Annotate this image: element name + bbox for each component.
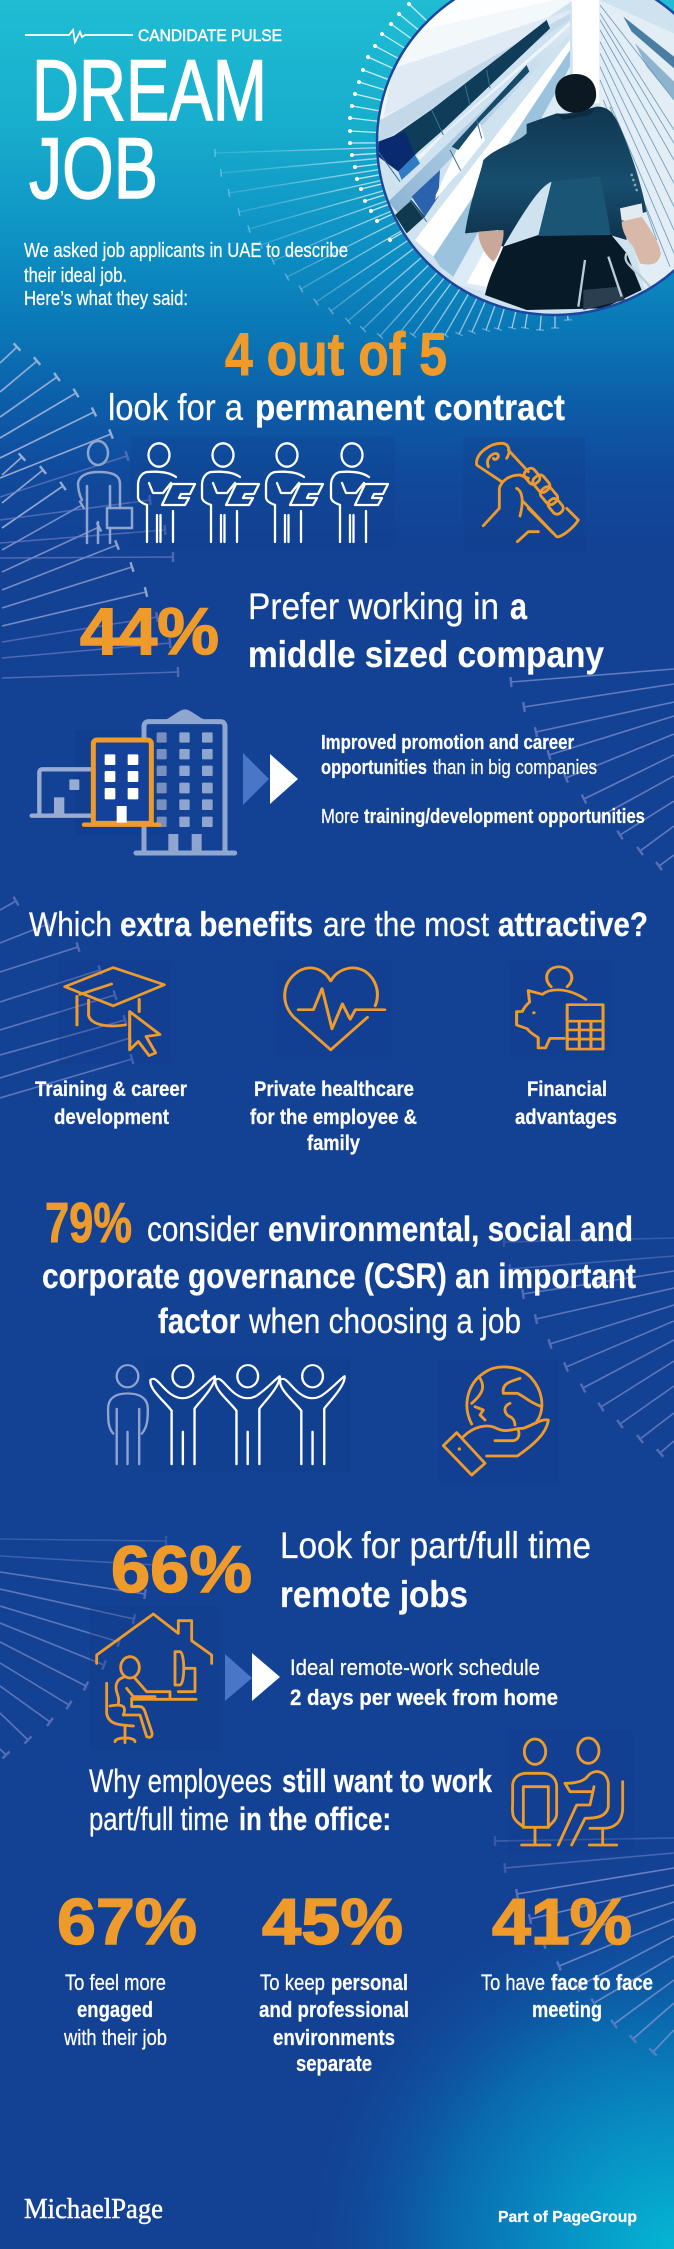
stat: 67 percent: 67% (57, 1885, 197, 1958)
label: private healthcare (250, 1078, 417, 1155)
text: to feel more engaged (63, 1970, 167, 2050)
panel: benefit training (35, 961, 187, 1129)
icon: person working from home (90, 1606, 220, 1750)
intro text (24, 240, 348, 310)
heading: reasons for the office: part/full time (89, 1801, 229, 1837)
text: keep environments separate: environments (273, 2025, 395, 2050)
icon: four of five people with contract (78, 436, 395, 548)
text: keep environments separate: and professional (259, 1997, 409, 2022)
text: company size reasons: Improved promotion and career (321, 732, 574, 754)
label: training and career development (35, 1078, 187, 1129)
title: DREAM (32, 43, 267, 139)
subheading: permanent contract: look for a (108, 387, 243, 428)
label: financial advantages: advantages (515, 1106, 617, 1129)
bottom right glow (284, 1859, 674, 2249)
text: keep environments separate: personal (331, 1970, 408, 1995)
left starburst rays, lower (0, 1539, 166, 1755)
icon: two people meeting (508, 1730, 633, 1853)
header: candidate pulse tag (25, 26, 282, 45)
stat: 79 percent CSR statement: 79% (45, 1191, 132, 1255)
panel: benefit healthcare (250, 961, 417, 1155)
left starburst rays, benefits (0, 901, 132, 1098)
title: JOB (29, 121, 158, 217)
left starburst rays, upper (0, 347, 178, 678)
text: keep environments separate (259, 1970, 409, 2076)
heading: reasons for the office: Why employees (89, 1763, 272, 1799)
text: face to face meeting: meeting (532, 1997, 602, 2022)
icon: company buildings (32, 709, 235, 853)
stat: 66 percent: 66% (111, 1532, 252, 1606)
subheading: permanent contract: permanent contract (255, 387, 565, 428)
text: face to face meeting (481, 1970, 653, 2022)
logo: Michael Page: MichaelPage (24, 2193, 163, 2225)
panel: reason separate environments (259, 1885, 409, 2076)
heading: remote jobs: Look for part/full time (280, 1525, 591, 1566)
label: training and career development: Training & career (35, 1078, 187, 1101)
heading: middle sized company: a (510, 586, 527, 627)
heading: extra benefits: attractive? (498, 906, 648, 944)
text: company size reasons: opportunities (321, 757, 427, 779)
header starburst rays (215, 4, 568, 336)
stat: 79 percent CSR statement: when choosing a job (248, 1302, 521, 1341)
heading: extra benefits: are the most (323, 906, 489, 944)
text: ideal remote schedule: 2 days per week from home (290, 1685, 558, 1710)
panel: reason face to face (481, 1885, 653, 2022)
label: private healthcare: family (307, 1132, 360, 1155)
right starburst rays, middle (504, 1238, 674, 1453)
panel: benefit financial (509, 961, 617, 1129)
label: financial advantages: Financial (527, 1078, 607, 1101)
subheading: permanent contract (108, 387, 565, 428)
intro text: their ideal job. (24, 265, 127, 287)
stat: 79 percent CSR statement: factor (158, 1302, 240, 1341)
footer: part of PageGroup: Part of PageGroup (498, 2209, 637, 2226)
photo: businessman looking up at skyscrapers (370, 0, 674, 327)
text: keep environments separate: separate (296, 2051, 372, 2076)
heading: extra benefits (29, 906, 648, 944)
stat: 41 percent: 41% (492, 1885, 632, 1958)
stat: 79 percent CSR statement (42, 1191, 636, 1341)
icon: hand holding globe (439, 1359, 559, 1483)
text: face to face meeting: To have (481, 1970, 545, 1995)
title (29, 43, 267, 217)
heading: extra benefits: Which (29, 906, 112, 944)
icon: piggy bank and calculator (509, 961, 612, 1058)
heading: 4 out of 5: 4 out of 5 (225, 321, 447, 388)
arrow: chevrons to company benefits (243, 753, 298, 805)
text: ideal remote schedule (290, 1655, 558, 1710)
text: to feel more engaged: with their job (63, 2025, 167, 2050)
intro text: Here’s what they said: (24, 288, 188, 310)
heading: reasons for the office (89, 1763, 492, 1837)
label: financial advantages (515, 1078, 617, 1129)
stat: 44 percent: 44% (80, 594, 219, 668)
heading: reasons for the office: in the office: (239, 1801, 391, 1837)
icon: heart with pulse (277, 961, 391, 1058)
right starburst rays, bottom (495, 1838, 674, 2052)
icon: graduation cap with cursor (58, 961, 171, 1063)
intro text: We asked job applicants in UAE to describe (24, 240, 348, 262)
icon: people celebrating (108, 1358, 350, 1471)
heading: middle sized company: middle sized company (248, 634, 604, 675)
stat: 45 percent: 45% (262, 1885, 403, 1958)
text: ideal remote schedule: Ideal remote-work schedule (290, 1655, 540, 1680)
text: company size reasons (321, 732, 645, 828)
stat: 79 percent CSR statement: consider (147, 1210, 259, 1249)
text: to feel more engaged: To feel more (65, 1970, 166, 1995)
panel: reason engaged (57, 1885, 197, 2050)
heading: remote jobs (280, 1525, 591, 1615)
heading: middle sized company (248, 586, 604, 675)
icon: hand holding rolled contract (463, 437, 585, 552)
right starburst rays, upper (511, 669, 674, 866)
text: to feel more engaged: engaged (77, 1997, 153, 2022)
arrow: chevrons to remote schedule (225, 1653, 280, 1701)
text: company size reasons: More (321, 806, 359, 828)
label: training and career development: development (54, 1106, 169, 1129)
label: private healthcare: for the employee & (250, 1106, 417, 1129)
heading: remote jobs: remote jobs (280, 1574, 468, 1615)
text: keep environments separate: To keep (260, 1970, 325, 1995)
text: company size reasons: than in big companies (433, 757, 597, 779)
header: candidate pulse tag: CANDIDATE PULSE (138, 26, 282, 45)
label: private healthcare: Private healthcare (254, 1078, 414, 1101)
text: face to face meeting: face to face (551, 1970, 653, 1995)
heading: extra benefits: extra benefits (120, 906, 313, 944)
heading: reasons for the office: still want to work (282, 1763, 492, 1799)
heading: middle sized company: Prefer working in (248, 586, 499, 627)
